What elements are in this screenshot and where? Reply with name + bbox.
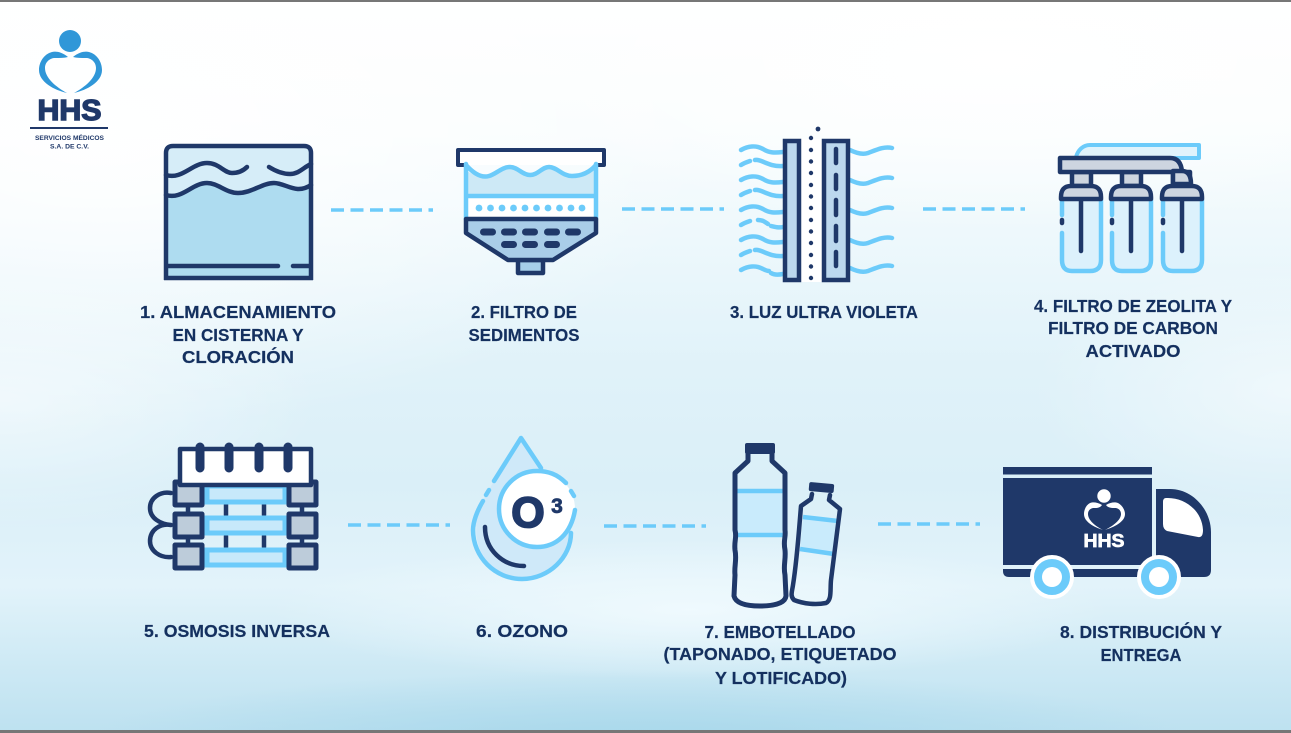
label 7: (TAPONADO, ETIQUETADO [664, 644, 896, 664]
icon 4: zeolite and carbon filters [1060, 145, 1203, 271]
label 6: 6. OZONO [476, 621, 568, 641]
logo: HHS Servicios Médicos: HHS [38, 95, 102, 127]
icon 6: ozone drop: O [511, 489, 545, 537]
connector 6-7 [604, 524, 706, 528]
icon 1: cistern [164, 146, 313, 280]
connector 5-6 [348, 523, 450, 527]
icon 8: delivery truck [1003, 467, 1211, 597]
label 7: Y LOTIFICADO) [715, 668, 847, 688]
label 4: FILTRO DE CARBON [1048, 318, 1218, 338]
logo: HHS Servicios Médicos [30, 30, 108, 150]
label 1: EN CISTERNA Y [172, 325, 304, 345]
icon 7: bottles [734, 443, 840, 606]
label 4: 4. FILTRO DE ZEOLITA Y [1034, 296, 1232, 316]
label 4: ACTIVADO [1086, 341, 1180, 361]
label 4 [1034, 296, 1232, 361]
icon 2: sediment filter [458, 150, 604, 273]
label 7 [664, 622, 896, 688]
label 2: 2. FILTRO DE [471, 302, 577, 322]
label 8: ENTREGA [1100, 645, 1182, 665]
label 8 [1060, 621, 1222, 665]
label 3: 3. LUZ ULTRA VIOLETA [730, 302, 918, 322]
label 2: SEDIMENTOS [468, 325, 580, 345]
label 8: 8. DISTRIBUCIÓN Y [1060, 621, 1222, 642]
icon 5: reverse osmosis [150, 447, 316, 568]
label 5: 5. OSMOSIS INVERSA [144, 621, 330, 641]
icon 3: UV light [741, 127, 892, 282]
connector 3-4 [923, 207, 1025, 211]
connector 7-8 [878, 522, 980, 526]
connector 2-3 [622, 207, 724, 211]
truck logo: HHS [1084, 530, 1124, 551]
label 1: CLORACIÓN [182, 346, 294, 367]
logo: HHS Servicios Médicos: S.A. DE C.V. [50, 144, 89, 150]
icon 6: ozone drop [473, 438, 575, 579]
logo: HHS Servicios Médicos: SERVICIOS MÉDICOS [35, 133, 104, 142]
label 1 [140, 302, 336, 367]
connector 1-2 [331, 208, 433, 212]
icon 6: ozone drop: 3 [551, 495, 563, 518]
label 2 [468, 302, 580, 345]
label 7: 7. EMBOTELLADO [704, 622, 856, 642]
label 1: 1. ALMACENAMIENTO [140, 302, 336, 322]
truck logo [1084, 489, 1125, 551]
